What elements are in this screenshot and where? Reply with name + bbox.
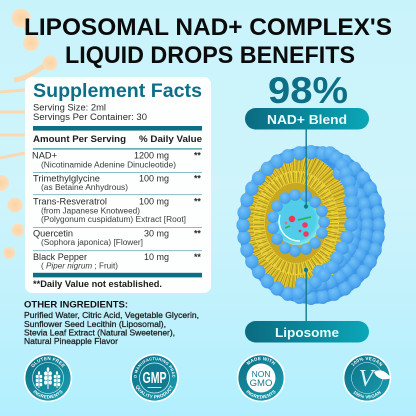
row: black pepper: ** <box>194 252 201 262</box>
badge: non GMO <box>236 354 286 402</box>
row: trimethylglycine: Trimethylglycine <box>33 174 100 184</box>
badge: non GMO: MADE WITH <box>246 356 276 365</box>
other ingredients: Natural Pineapple Flavor <box>24 336 118 346</box>
badge: GMP: GOOD MANUFACTURING PRACTICE <box>134 357 176 378</box>
row: trimethylglycine <box>33 174 201 192</box>
row: trans-resveratrol: (from Japanese Knotweed) <box>41 206 140 215</box>
row: quercetin <box>33 229 201 247</box>
other ingredients <box>24 298 199 346</box>
panel: supplement facts <box>25 77 211 293</box>
row: black pepper <box>33 252 201 271</box>
table header: % Daily Value <box>139 134 202 144</box>
cut edge spheres <box>291 146 359 300</box>
title <box>24 14 392 69</box>
other ingredients: Sunflower Seed Lecithin (Liposomal), <box>24 319 166 329</box>
row: quercetin: ** <box>194 229 201 239</box>
pill: NAD+ Blend <box>245 108 369 130</box>
decorative peach molecules <box>0 8 58 259</box>
row: quercetin: Quercetin <box>33 229 73 239</box>
badge: 100% vegan <box>342 354 392 402</box>
row: trans-resveratrol <box>33 197 201 224</box>
icon: wheat <box>36 367 60 389</box>
badge: 100% vegan: 100% VEGAN <box>351 356 383 366</box>
heading: supplement facts: Supplement Facts <box>33 81 202 102</box>
inner core <box>274 199 320 245</box>
row: quercetin: 30 mg <box>144 229 169 239</box>
footnote: **Daily Value not established. <box>33 279 162 289</box>
row: trans-resveratrol: (Polygonum cuspidatum) Extract [Root] <box>41 215 186 224</box>
badge: GMP: GMP <box>142 370 167 387</box>
pill: Liposome <box>245 321 369 342</box>
other ingredients: OTHER INGREDIENTS: <box>24 298 128 309</box>
pill: NAD+ Blend: NAD+ Blend <box>267 113 347 127</box>
serving info: Servings Per Container: 30 <box>33 112 147 122</box>
row: trans-resveratrol: Trans-Resveratrol <box>33 197 107 207</box>
row: NAD+: NAD+ <box>32 151 57 161</box>
badge: GMP <box>130 354 179 402</box>
row: NAD+: (Nicotinamide Adenine Dinucleotide) <box>41 161 176 170</box>
row: trimethylglycine: ** <box>194 174 201 184</box>
outer shell of lipid spheres <box>236 145 386 305</box>
title: LIPOSOMAL NAD+ COMPLEX'S <box>24 14 392 41</box>
row: black pepper: ( Piper nigrum ; Fruit) <box>41 262 118 271</box>
row: quercetin: (Sophora japonica) [Flower] <box>41 238 143 247</box>
badge: GMP: QUALITY PRODUCT <box>136 385 173 398</box>
row: trimethylglycine: (as Betaine Anhydrous) <box>41 183 128 192</box>
pill: Liposome: Liposome <box>275 326 339 340</box>
row: trans-resveratrol: ** <box>194 197 201 207</box>
badge: gluten free <box>24 354 72 402</box>
serving info: Serving Size: 2ml <box>33 103 106 113</box>
table header <box>33 134 202 144</box>
row: NAD+ <box>32 151 201 170</box>
serving info <box>33 103 147 122</box>
icon: leaf <box>374 370 391 379</box>
liposome illustration <box>236 145 386 305</box>
row: NAD+: ** <box>194 151 201 161</box>
row: NAD+: 1200 mg <box>134 151 169 161</box>
row: trimethylglycine: 100 mg <box>139 174 169 184</box>
badge: gluten free: INGREDIENTS <box>33 390 62 398</box>
other ingredients: Stevia Leaf Extract (Natural Sweetener), <box>24 327 175 337</box>
row: black pepper: 10 mg <box>144 252 169 262</box>
other ingredients: Purified Water, Citric Acid, Vegetable Glycerin, <box>24 310 199 320</box>
badge: 100% vegan: V <box>359 366 376 392</box>
table header: Amount Per Serving <box>33 134 126 144</box>
badge: non GMO: GMO <box>250 378 272 389</box>
badge: non GMO: NON <box>252 369 270 379</box>
stat: 98%: 98% <box>268 70 348 111</box>
lipid bilayer <box>242 153 350 293</box>
badge: non GMO: INGREDIENTS <box>246 390 276 398</box>
badge: gluten free: GLUTEN FREE <box>31 356 65 368</box>
row: black pepper: Black Pepper <box>33 252 87 262</box>
badge: 100% vegan: 100% VEGAN <box>353 390 381 398</box>
connector line: Liposome <box>304 268 308 322</box>
inner ring of spheres <box>267 189 330 257</box>
row: trans-resveratrol: 100 mg <box>139 197 169 207</box>
title: LIQUID DROPS BENEFITS <box>65 42 355 69</box>
connector line: NAD+ Blend <box>304 129 308 209</box>
